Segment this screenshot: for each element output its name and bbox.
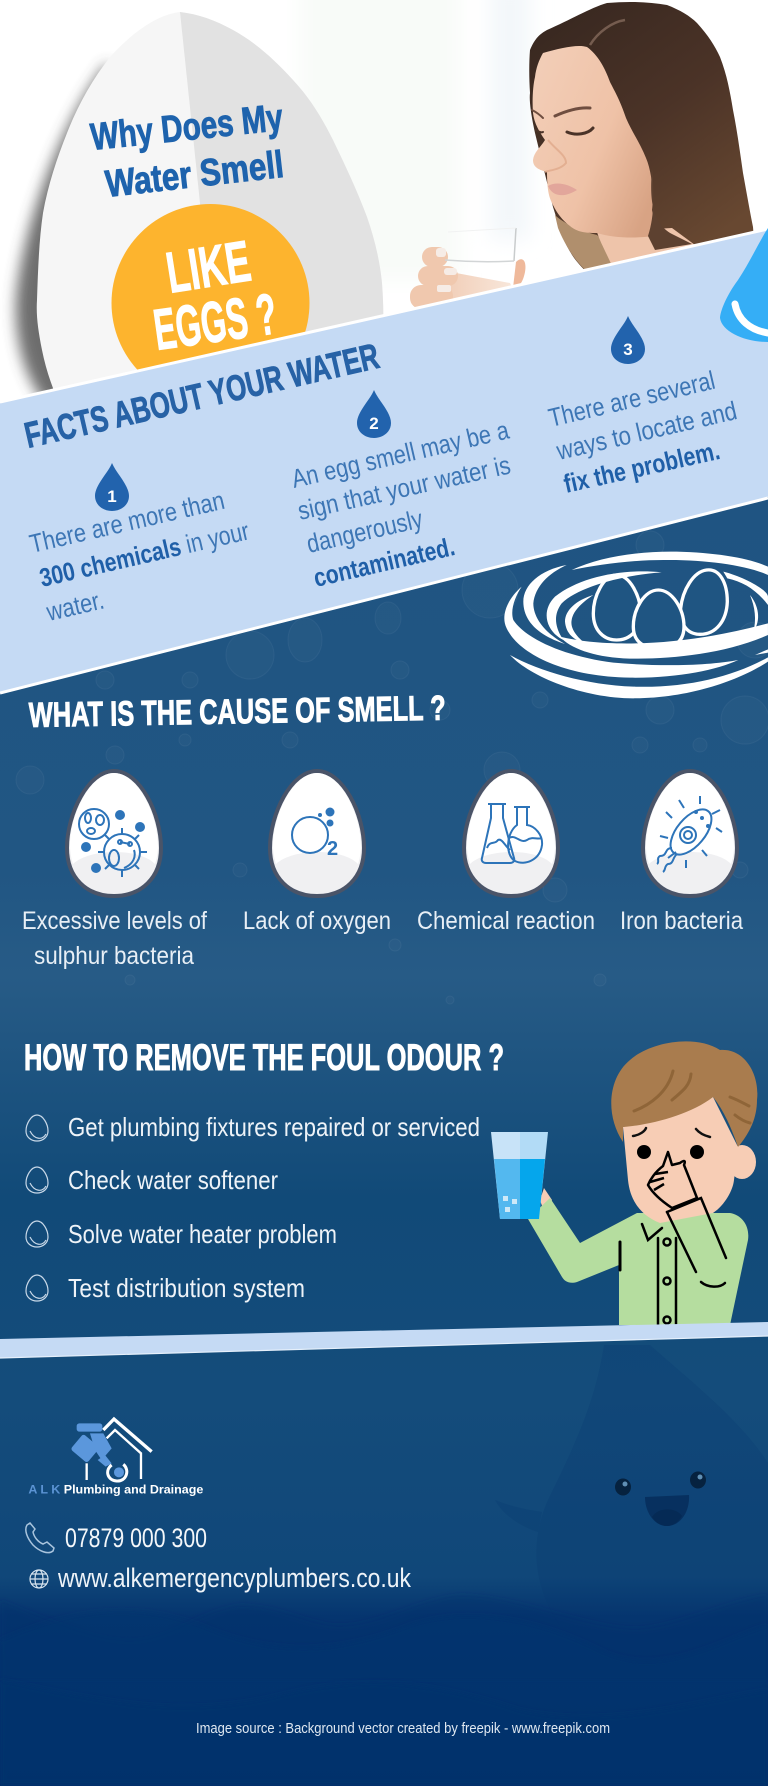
cause 1: sulphur bacteria [22, 771, 207, 970]
fact 3 [546, 316, 740, 499]
woman hand palm [420, 270, 515, 320]
phone number: 07879 000 300 [65, 1523, 207, 1553]
icon: large water drop [720, 228, 768, 342]
heading: how to remove the foul odour: HOW TO REMOVE THE FOUL ODOUR ? [24, 1037, 504, 1078]
panel: facts about your water [21, 316, 740, 627]
drop body [536, 1345, 768, 1625]
icon: drop number 1 [95, 463, 129, 511]
cause 4: iron bacteria [620, 771, 743, 935]
boy finger lines [650, 1172, 668, 1190]
icon: egg bullet [26, 1275, 48, 1301]
image source credit: Image source : Background vector created by freepik - www.freepik.com [196, 1721, 610, 1737]
woman hair highlight part [590, 20, 625, 45]
nest eggs [593, 570, 727, 648]
facts heading: FACTS ABOUT YOUR WATER [21, 335, 383, 456]
step text: Solve water heater problem [68, 1219, 337, 1249]
fact 3 text: ways to locate and [553, 395, 740, 466]
contact: website [30, 1563, 411, 1593]
orange circle [112, 204, 310, 370]
title line 1: Why Does My [89, 97, 285, 159]
logo wrench center [114, 1467, 124, 1477]
glass of water [491, 1132, 548, 1219]
woman thumb [513, 259, 525, 288]
dark blue main background [0, 480, 768, 1786]
woman fingers [410, 247, 458, 309]
eggs text: EGGS ? [150, 281, 281, 363]
cause 3: chemical reaction [417, 771, 595, 935]
icon: egg bullet [26, 1221, 48, 1247]
step text: Get plumbing fixtures repaired or serviced [68, 1112, 480, 1142]
light blue divider band [0, 1322, 768, 1358]
fact 1 text: 300 chemicals in your [37, 515, 252, 593]
logo name: A L K Plumbing and Drainage [28, 1483, 204, 1497]
icon: egg bullet [26, 1115, 48, 1141]
step 2 [26, 1165, 278, 1195]
fact 3 text [546, 365, 740, 499]
panel: causes of smell [22, 771, 743, 970]
label: chemical reaction: Chemical reaction [417, 907, 595, 935]
website url: www.alkemergencyplumbers.co.uk [57, 1563, 411, 1593]
fact 1 text: There are more than [27, 485, 227, 559]
heading: what is the cause of smell: WHAT IS THE CAUSE OF SMELL ? [28, 689, 446, 735]
background waves [0, 1595, 768, 1786]
icon: drop number 3 [611, 316, 645, 364]
icon: egg bullet [26, 1167, 48, 1193]
egg icon: bacteria [67, 771, 161, 896]
fact 3 text: fix the problem. [561, 435, 723, 499]
cause 2: lack of oxygen [243, 771, 391, 935]
step text: Test distribution system [68, 1273, 305, 1303]
step 1 [26, 1112, 480, 1142]
icon: drop number 2: 2 [369, 414, 379, 433]
panel: removal steps list [26, 1112, 480, 1303]
contact: phone [26, 1523, 207, 1553]
boy face [623, 1097, 738, 1223]
logo faucet and wrench [70, 1423, 112, 1467]
label: iron bacteria: Iron bacteria [620, 907, 743, 935]
like text: LIKE [162, 228, 255, 306]
icon: globe [30, 1570, 48, 1588]
egg base [37, 12, 383, 440]
logo house [87, 1419, 152, 1480]
label: excessive levels: sulphur bacteria [34, 942, 194, 970]
title line 2: Water Smell [103, 144, 286, 206]
boy arm hand [540, 1188, 552, 1215]
fact 2 text: An egg smell may be a [289, 415, 512, 494]
boy eyes and brows [633, 1128, 710, 1159]
egg icon: oxygen: 2 [327, 838, 338, 860]
drop arm [495, 1500, 542, 1532]
light blue facts band [0, 230, 768, 692]
woman neck [597, 228, 695, 266]
water drop character [495, 1345, 768, 1625]
woman nose shade [545, 140, 566, 172]
woman lower light hair [555, 215, 625, 274]
title egg [16, 12, 383, 440]
fact 2 text [289, 415, 513, 593]
icon: drop number 1: 1 [107, 487, 117, 506]
fact 1 [27, 463, 252, 627]
icon: phone [26, 1523, 54, 1553]
woman eyebrow and eye [532, 108, 593, 134]
label: excessive levels [22, 907, 207, 970]
step text: Check water softener [68, 1165, 278, 1195]
divider white edge [0, 1336, 768, 1358]
band white edges [0, 229, 768, 693]
drop eyes [615, 1472, 706, 1496]
egg shaded half [180, 12, 383, 440]
boy hair lines [634, 1071, 750, 1123]
logo wrench ring [108, 1464, 127, 1481]
company logo [28, 1419, 204, 1497]
woman hair [529, 2, 754, 275]
label: excessive levels: Excessive levels of [22, 907, 207, 935]
fact 2 [289, 390, 513, 593]
drop mouth [645, 1495, 689, 1526]
photo illustration: woman smelling water [410, 2, 754, 320]
boy holding glass of water [491, 1041, 757, 1325]
woman lips [548, 183, 577, 195]
water glass [445, 228, 516, 262]
fact 2 text: dangerously [304, 503, 425, 559]
background water droplets [16, 531, 768, 1004]
boy hand on nose [648, 1152, 697, 1208]
woman face [533, 46, 668, 238]
woman hair strand [648, 168, 692, 250]
woman nails [436, 248, 457, 292]
icon: drop number 3: 3 [623, 340, 633, 359]
egg shadow [16, 62, 120, 418]
boy sleeve and shirt lines [620, 1198, 726, 1325]
boy ear [728, 1145, 756, 1179]
boy shirt [528, 1198, 748, 1325]
step 3 [26, 1219, 337, 1249]
boy hair [611, 1041, 757, 1147]
egg icon: bacterium [643, 771, 737, 896]
icon: drop number 2 [357, 390, 391, 438]
fact 1 text [27, 485, 252, 627]
fact 3 text: There are several [546, 365, 718, 433]
egg icon: flasks [464, 771, 558, 896]
background: soft window tints [300, 0, 530, 280]
label: lack of oxygen: Lack of oxygen [243, 907, 391, 935]
fact 2 text: contaminated. [311, 531, 458, 593]
fact 1 text: water. [43, 585, 107, 627]
fact 2 text: sign that your water is [295, 450, 513, 526]
egg icon: oxygen [270, 771, 364, 896]
icon: nest with eggs [504, 552, 768, 698]
nest strands [504, 552, 768, 698]
step 4 [26, 1273, 305, 1303]
